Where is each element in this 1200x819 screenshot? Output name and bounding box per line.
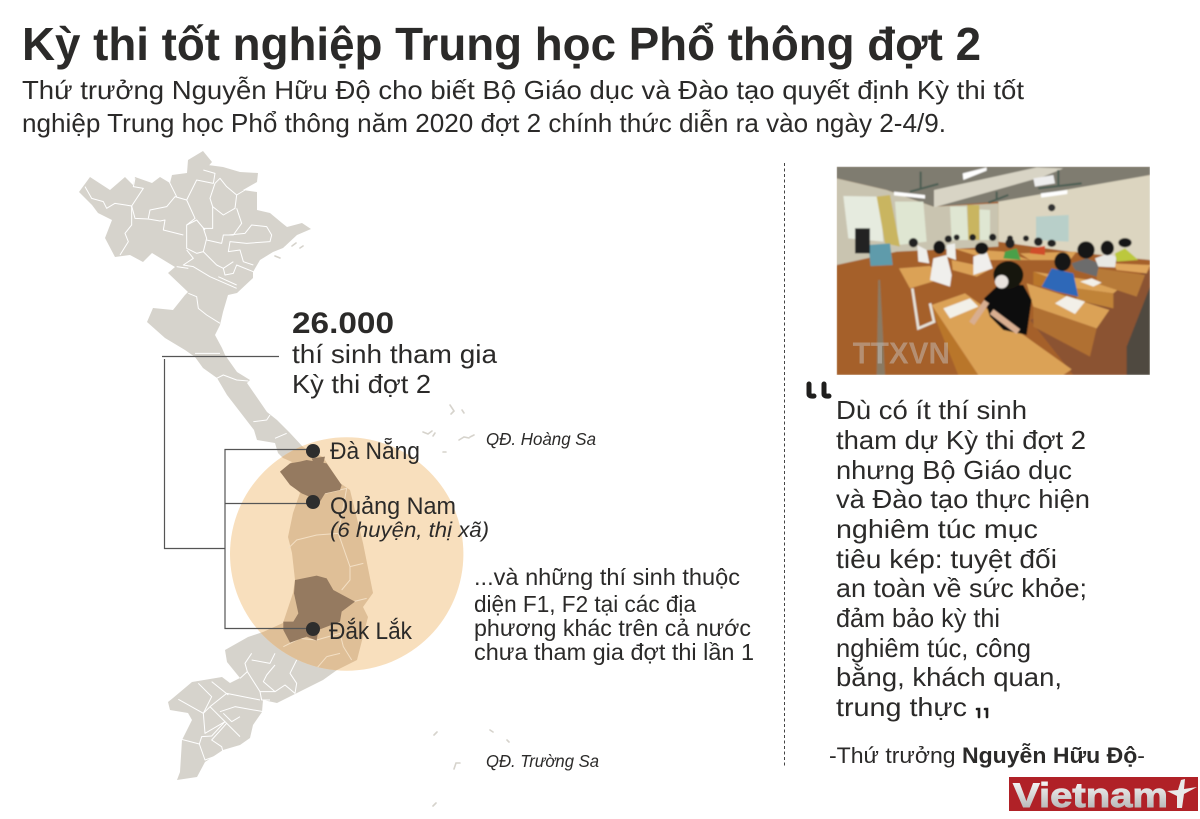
label: Đà Nẵng: Đà Nẵng: [330, 437, 420, 465]
province borders south: [178, 653, 297, 760]
quote text: tham dự Kỳ thi đợt 2: [836, 425, 1086, 455]
quote text: nghiêm túc mục: [836, 514, 1038, 544]
quote text: nhưng Bộ Giáo dục: [836, 455, 1072, 485]
quote text: [836, 395, 1090, 722]
province borders north: [85, 170, 287, 438]
subtitle: [22, 75, 1025, 138]
label: Trường Sa: QĐ. Trường Sa: [486, 751, 599, 771]
logo: Vietnam+: Vietnam: [1013, 777, 1168, 815]
quote text: đảm bảo kỳ thi: [836, 603, 1000, 633]
note: F1, F2 candidates: diện F1, F2 tại các địa: [474, 591, 696, 617]
map of Vietnam: [79, 151, 509, 806]
label: Quảng Nam: (6 huyện, thị xã): [330, 518, 489, 542]
callout: 26.000 candidates: thí sinh tham gia: [292, 339, 498, 369]
subtitle: Thứ trưởng Nguyễn Hữu Độ cho biết Bộ Giáo dục và Đào tạo quyết định Kỳ thi tốt: [22, 75, 1025, 105]
quote text: bằng, khách quan,: [836, 662, 1062, 692]
quote text: nghiêm túc, công: [836, 633, 1031, 663]
highlight circle: [230, 437, 464, 671]
quote text: Dù có ít thí sinh: [836, 395, 1027, 425]
quote attribution: -Thứ trưởng Nguyễn Hữu Độ -: [829, 743, 1145, 768]
icon: plus: [1167, 779, 1197, 808]
location dots: [306, 444, 320, 636]
dashed divider: [784, 163, 786, 768]
photo: exam room: [837, 167, 1150, 375]
label: Hoàng Sa: QĐ. Hoàng Sa: [486, 429, 596, 449]
icon: closing quote: [977, 709, 987, 717]
note: F1, F2 candidates: ...và những thí sinh thuộc: [474, 564, 740, 590]
quote text: trung thực: [836, 692, 967, 722]
quote text: tiêu kép: tuyệt đối: [836, 544, 1057, 574]
connector lines: [162, 356, 313, 628]
quote text: an toàn về sức khỏe;: [836, 573, 1087, 603]
label: Đắk Lắk: Đắk Lắk: [329, 618, 413, 645]
map islands: [275, 238, 509, 806]
photo watermark: TTXVN: [853, 336, 950, 370]
subtitle: nghiệp Trung học Phổ thông năm 2020 đợt 2 chính thức diễn ra vào ngày 2-4/9.: [22, 108, 946, 138]
note: F1, F2 candidates: [474, 564, 754, 665]
map part inside circle: [260, 446, 373, 670]
logo: Vietnam+: [1009, 777, 1198, 815]
map land: [79, 151, 373, 780]
province: Quảng Nam: [280, 460, 342, 502]
province: Đắk Lắk: [283, 576, 355, 643]
label: Quảng Nam: [330, 493, 489, 542]
note: F1, F2 candidates: chưa tham gia đợt thi lần 1: [474, 639, 754, 665]
province: Đà Nẵng: [312, 457, 325, 463]
callout: 26.000 candidates: Kỳ thi đợt 2: [292, 369, 431, 399]
callout: 26.000 candidates: [292, 307, 498, 399]
icon: opening quote: [809, 384, 829, 396]
title: Kỳ thi tốt nghiệp Trung học Phổ thông đợt 2: [22, 18, 981, 70]
quote text: và Đào tạo thực hiện: [836, 484, 1090, 514]
callout: 26.000 candidates: 26.000: [292, 307, 394, 340]
note: F1, F2 candidates: phương khác trên cả nước: [474, 615, 751, 641]
label: Quảng Nam: Quảng Nam: [330, 493, 456, 520]
